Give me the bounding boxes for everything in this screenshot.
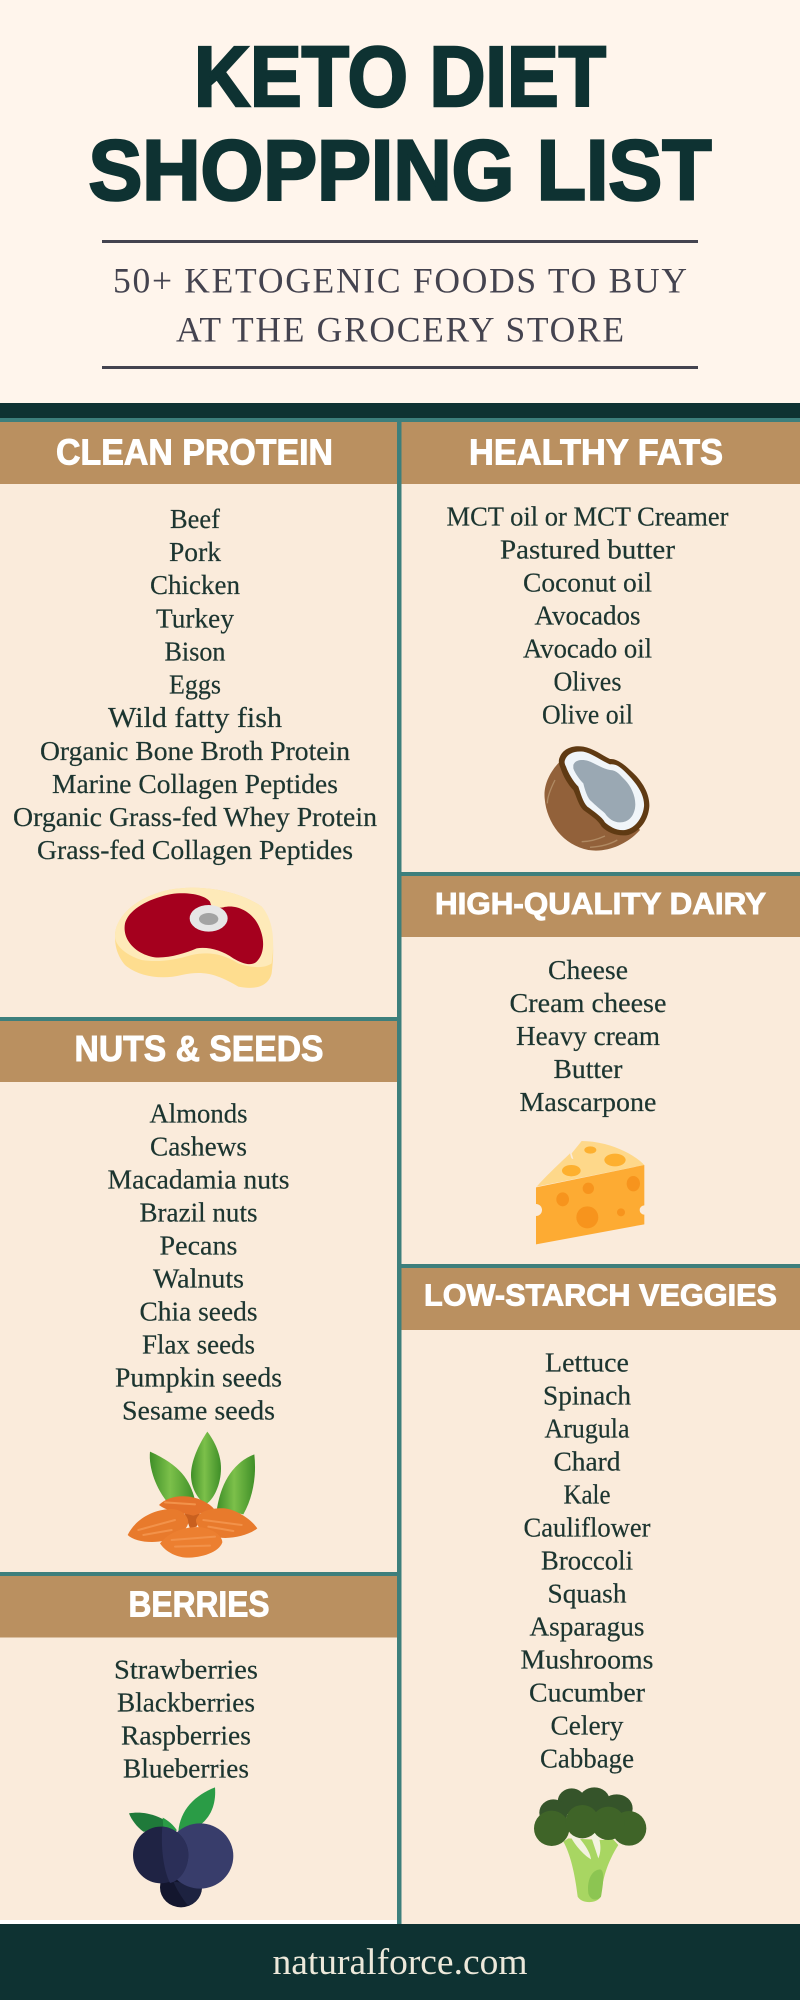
list: veggies: Squash — [548, 1578, 627, 1608]
dark band — [0, 403, 800, 418]
list: clean protein: Organic Bone Broth Protein — [40, 736, 351, 766]
list: nuts and seeds: Walnuts — [153, 1264, 244, 1294]
list: veggies: Mushrooms — [520, 1644, 654, 1674]
list: healthy fats: Olives — [554, 666, 622, 696]
list: veggies: Chard — [554, 1446, 621, 1476]
icon: coconut — [544, 746, 649, 851]
heading: high-quality dairy — [402, 872, 800, 937]
list: nuts and seeds: Pecans — [160, 1230, 238, 1260]
list: veggies — [520, 1348, 654, 1774]
list: nuts and seeds: Macadamia nuts — [108, 1164, 290, 1194]
list: clean protein: Chicken — [150, 570, 240, 600]
list: nuts and seeds: Flax seeds — [142, 1330, 255, 1360]
heading: berries: BERRIES — [128, 1584, 270, 1624]
icon: broccoli — [534, 1787, 646, 1902]
list: clean protein: Bison — [164, 636, 226, 666]
list: veggies: Lettuce — [545, 1348, 629, 1378]
footer: naturalforce.com — [272, 1942, 528, 1983]
list: veggies: Kale — [564, 1480, 611, 1510]
list: clean protein: Organic Grass-fed Whey Protein — [13, 802, 378, 832]
list: clean protein: Grass-fed Collagen Peptides — [37, 835, 353, 865]
list: veggies: Asparagus — [530, 1612, 644, 1642]
list: healthy fats — [446, 502, 729, 730]
list: healthy fats: Olive oil — [542, 700, 633, 730]
list: dairy: Cheese — [548, 955, 628, 985]
list: nuts and seeds: Brazil nuts — [140, 1198, 258, 1228]
list: nuts and seeds — [108, 1098, 290, 1426]
list: clean protein: Wild fatty fish — [108, 703, 282, 734]
list: dairy — [510, 955, 667, 1117]
title: SHOPPING LIST — [88, 124, 712, 218]
panel: clean protein — [0, 422, 397, 988]
icon: almonds and leaves — [128, 1432, 257, 1558]
list: veggies: Celery — [550, 1710, 624, 1740]
list: nuts and seeds: Chia seeds — [140, 1296, 258, 1326]
panel: healthy fats — [402, 422, 800, 851]
heading: healthy fats: HEALTHY FATS — [469, 432, 723, 472]
list: berries: Blueberries — [123, 1754, 249, 1784]
heading: healthy fats — [402, 422, 800, 484]
list: clean protein: Beef — [170, 504, 220, 534]
list: clean protein: Pork — [169, 537, 222, 567]
icon: cheese — [530, 1141, 649, 1244]
list: dairy: Mascarpone — [520, 1087, 657, 1117]
heading: low-starch veggies: LOW-STARCH VEGGIES — [424, 1278, 777, 1312]
heading: low-starch veggies — [402, 1264, 800, 1330]
list: berries: Blackberries — [117, 1688, 255, 1718]
heading: clean protein — [0, 422, 397, 484]
list: veggies: Cabbage — [540, 1744, 634, 1774]
list: nuts and seeds: Pumpkin seeds — [115, 1362, 282, 1392]
panel: low-starch veggies — [402, 1264, 800, 1902]
list: clean protein: Turkey — [156, 604, 234, 634]
list: dairy: Butter — [554, 1054, 622, 1084]
list: berries — [114, 1654, 258, 1784]
title — [88, 30, 712, 218]
list: veggies: Arugula — [544, 1414, 630, 1444]
list: veggies: Spinach — [543, 1380, 631, 1410]
list: nuts and seeds: Cashews — [150, 1132, 247, 1162]
list: dairy: Heavy cream — [516, 1021, 660, 1051]
list: berries: Strawberries — [114, 1654, 258, 1684]
heading: clean protein: CLEAN PROTEIN — [56, 432, 333, 472]
icon: steak — [115, 888, 273, 988]
icon: blueberries — [129, 1787, 233, 1907]
panel: berries — [0, 1572, 397, 1907]
panel backgrounds — [0, 418, 800, 1924]
list: healthy fats: Coconut oil — [523, 568, 652, 598]
list: veggies: Cucumber — [529, 1678, 645, 1708]
list: healthy fats: Pastured butter — [500, 534, 675, 564]
list: clean protein: Eggs — [169, 670, 221, 700]
heading: berries — [0, 1572, 397, 1638]
heading: nuts and seeds — [0, 1017, 397, 1082]
subtitle: 50+ KETOGENIC FOODS TO BUY — [113, 260, 687, 300]
list: healthy fats: Avocados — [534, 600, 640, 630]
footer — [0, 1924, 800, 2000]
panel: high-quality dairy — [402, 872, 800, 1244]
list: healthy fats: MCT oil or MCT Creamer — [446, 502, 729, 532]
heading: nuts and seeds: NUTS & SEEDS — [74, 1028, 324, 1069]
title: KETO DIET — [194, 30, 606, 125]
subtitle — [113, 260, 687, 350]
list: clean protein — [13, 504, 378, 865]
subtitle: AT THE GROCERY STORE — [176, 310, 624, 350]
list: berries: Raspberries — [121, 1720, 251, 1750]
list: clean protein: Marine Collagen Peptides — [52, 769, 338, 799]
list: healthy fats: Avocado oil — [523, 634, 652, 664]
list: veggies: Broccoli — [541, 1546, 633, 1576]
panel: nuts and seeds — [0, 1017, 397, 1558]
list: nuts and seeds: Almonds — [150, 1098, 248, 1128]
heading: high-quality dairy: HIGH-QUALITY DAIRY — [435, 886, 766, 921]
list: dairy: Cream cheese — [510, 988, 667, 1018]
list: nuts and seeds: Sesame seeds — [122, 1396, 275, 1426]
list: veggies: Cauliflower — [524, 1512, 651, 1542]
